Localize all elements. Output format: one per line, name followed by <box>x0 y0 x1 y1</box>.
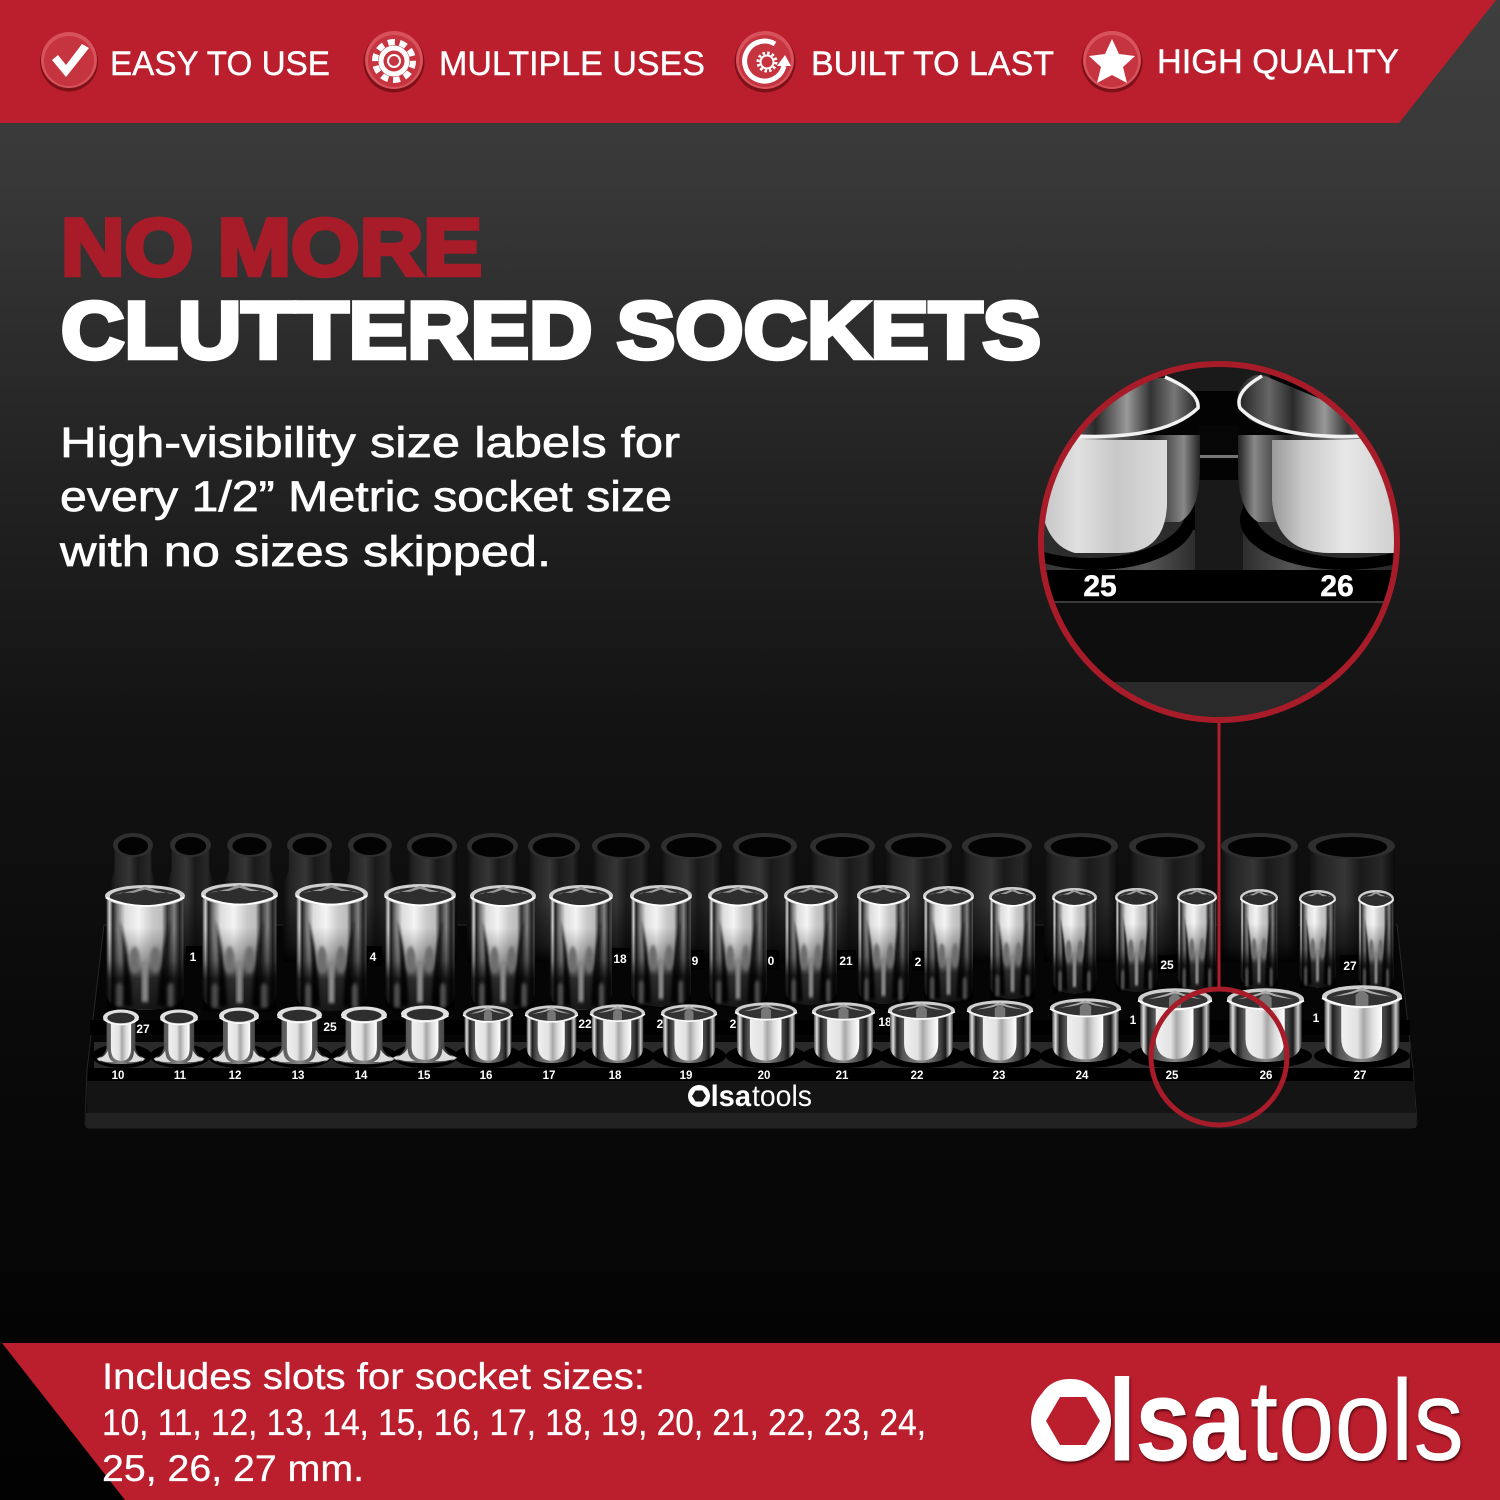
partly hidden size labels: 27 <box>136 1022 150 1036</box>
partly hidden size labels: 22 <box>578 1017 592 1031</box>
icon: cycle gear badge <box>734 31 796 92</box>
size labels: 26 <box>1260 1070 1272 1082</box>
feature: easy to use <box>40 32 330 92</box>
socket organizer tray <box>85 833 1417 1128</box>
tray logo: Olsa <box>688 1080 751 1113</box>
callout magnified view: 25 <box>1083 570 1117 603</box>
partly hidden size labels: 27 <box>1343 959 1357 973</box>
icon: star badge <box>1082 31 1142 92</box>
description text: with no sizes skipped. <box>59 528 551 576</box>
partly hidden size labels: 9 <box>692 954 699 968</box>
size labels: 13 <box>292 1070 304 1082</box>
partly hidden size labels: 18 <box>878 1015 892 1029</box>
size labels: 22 <box>911 1070 923 1082</box>
partly hidden size labels: 25 <box>323 1020 337 1034</box>
partly hidden size labels: 2 <box>730 1017 737 1031</box>
socket sizes text: Includes slots for socket sizes: <box>102 1356 645 1397</box>
socket sizes text: 25, 26, 27 mm. <box>102 1448 364 1489</box>
row 1 chrome sockets <box>97 985 1402 1064</box>
size labels: 25 <box>1166 1070 1179 1082</box>
icon: check badge <box>40 32 98 92</box>
feature: multiple uses: MULTIPLE USES <box>439 45 705 83</box>
size labels: 12 <box>229 1070 241 1082</box>
icon: gear badge <box>364 31 424 92</box>
size labels: 18 <box>609 1070 622 1082</box>
socket sizes text <box>102 1356 926 1489</box>
feature: easy to use: EASY TO USE <box>110 45 330 83</box>
size labels: 21 <box>836 1070 849 1082</box>
row 2 chrome sockets <box>105 883 1394 1011</box>
heading <box>61 203 1041 376</box>
partly hidden size labels <box>90 946 1410 1036</box>
partly hidden size labels: 4 <box>370 950 377 964</box>
partly hidden size labels: 21 <box>839 954 853 968</box>
feature: built to last <box>734 31 1054 92</box>
size labels: 20 <box>758 1070 770 1082</box>
socket sizes text: 10, 11, 12, 13, 14, 15, 16, 17, 18, 19, 20, 21, 22, 23, 24, <box>102 1402 926 1443</box>
callout magnified view <box>1038 361 1400 723</box>
tray logo <box>688 1080 812 1113</box>
size labels: 19 <box>680 1070 692 1082</box>
size labels: 11 <box>174 1070 187 1082</box>
partly hidden size labels: 1 <box>190 950 197 964</box>
footer banner <box>2 1343 1500 1500</box>
partly hidden size labels: 2 <box>657 1017 664 1031</box>
feature: high quality: HIGH QUALITY <box>1157 43 1399 81</box>
heading: NO MORE <box>61 203 482 293</box>
partly hidden size labels: 18 <box>613 952 627 966</box>
size labels <box>112 1070 1366 1082</box>
description text <box>59 419 680 576</box>
callout magnified view: 26 <box>1320 570 1354 603</box>
partly hidden size labels: 25 <box>1160 958 1174 972</box>
partly hidden size labels: 2 <box>915 955 922 969</box>
partly hidden size labels: 0 <box>768 954 775 968</box>
size labels: 16 <box>480 1070 492 1082</box>
brand logo <box>1031 1357 1464 1485</box>
socket holes <box>92 1044 1410 1068</box>
partly hidden size labels: 1 <box>1130 1013 1137 1027</box>
brand logo: tools <box>1250 1357 1464 1485</box>
description text: every 1/2” Metric socket size <box>60 473 672 521</box>
partly hidden size labels: 1 <box>1313 1011 1320 1025</box>
feature: multiple uses <box>364 31 705 92</box>
heading: CLUTTERED SOCKETS <box>61 286 1041 376</box>
tray logo: tools <box>752 1080 812 1113</box>
size labels: 14 <box>355 1070 368 1082</box>
feature: high quality <box>1082 31 1399 92</box>
size labels: 23 <box>993 1070 1005 1082</box>
size labels: 10 <box>112 1070 124 1082</box>
row 3 black sockets <box>110 833 1395 962</box>
feature: built to last: BUILT TO LAST <box>811 45 1054 83</box>
size labels: 15 <box>418 1070 431 1082</box>
tray body <box>85 925 1417 1128</box>
description text: High-visibility size labels for <box>60 419 680 467</box>
size labels: 17 <box>543 1070 555 1082</box>
brand logo: Olsa <box>1032 1357 1246 1485</box>
header banner <box>0 0 1496 123</box>
size labels: 24 <box>1076 1070 1089 1082</box>
size labels: 27 <box>1354 1070 1366 1082</box>
callout line <box>1218 722 1220 988</box>
callout small ring <box>1151 989 1287 1125</box>
